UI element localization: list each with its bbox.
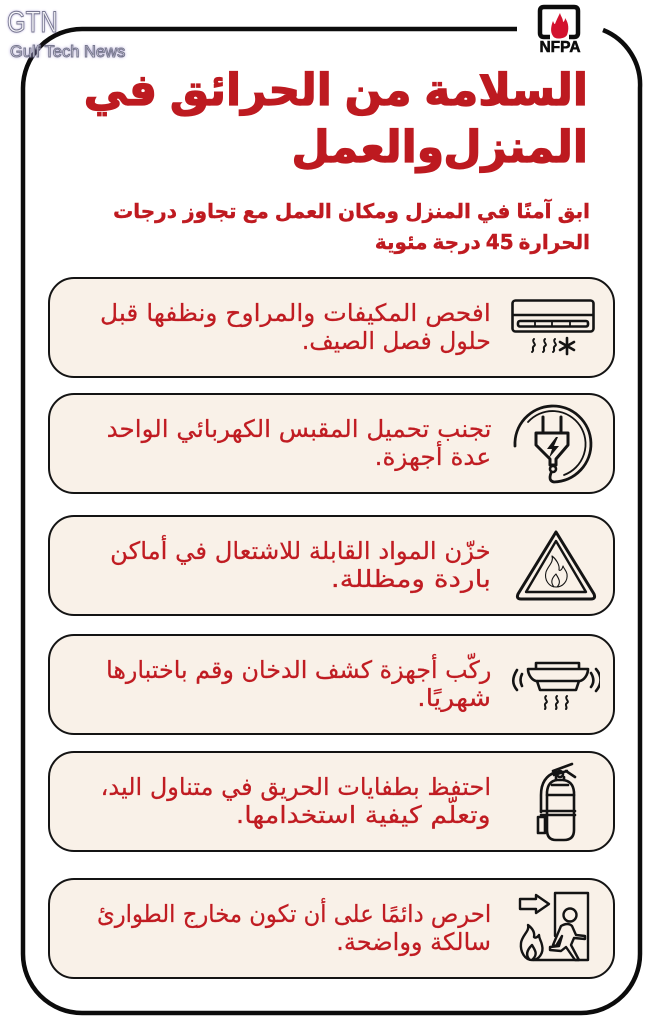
title: المنزل والعمل xyxy=(292,122,588,173)
tip text: تجنب تحميل المقبس الكهربائي الواحد xyxy=(106,415,491,443)
tip text: افحص المكيفات والمراوح ونظفها قبل xyxy=(100,299,491,327)
title xyxy=(84,65,588,174)
tip text xyxy=(106,652,491,712)
panel: emergency exits xyxy=(48,878,615,979)
watermark: GTN Gulf Tech News xyxy=(6,6,126,61)
icon: air conditioner xyxy=(511,299,595,356)
watermark: GTN Gulf Tech News: GTN xyxy=(7,6,58,39)
panel: avoid overloading socket xyxy=(48,393,615,494)
panel: check air conditioners xyxy=(48,277,615,378)
watermark: GTN Gulf Tech News: Gulf Tech News xyxy=(10,43,125,61)
tip text: باردة ومظللة. xyxy=(331,565,491,593)
panel: fire extinguishers xyxy=(48,751,615,852)
tip text: حلول فصل الصيف. xyxy=(302,327,491,355)
logo: NFPA: NFPA xyxy=(539,39,581,56)
tip text: احرص دائمًا على أن تكون مخارج الطوارئ xyxy=(97,900,491,928)
icon: emergency exit xyxy=(518,892,590,962)
logo: NFPA xyxy=(538,4,581,56)
tip text xyxy=(101,773,491,830)
subtitle xyxy=(113,198,590,254)
panel: store flammable materials xyxy=(48,515,615,616)
panel: smoke detectors xyxy=(48,634,615,735)
icon: flammable warning triangle xyxy=(516,530,596,600)
tip text: عدة أجهزة. xyxy=(374,443,491,471)
tip text: خزّن المواد القابلة للاشتعال في أماكن xyxy=(110,537,491,565)
icon: smoke detector xyxy=(512,662,600,710)
icon: fire extinguisher xyxy=(536,762,576,842)
icon: electric plug xyxy=(514,404,592,484)
tip text: شهريًا. xyxy=(417,684,491,712)
tip text xyxy=(100,299,491,356)
subtitle: ابق آمنًا في المنزل ومكان العمل مع تجاوز درجات xyxy=(113,199,590,223)
subtitle: الحرارة 45 درجة مئوية xyxy=(375,230,590,254)
tip text xyxy=(97,898,491,956)
title: السلامة من الحرائق في xyxy=(84,65,588,116)
tip text: سالكة وواضحة. xyxy=(336,928,491,956)
tip text: وتعلّم كيفية استخدامها. xyxy=(236,801,491,829)
tip text xyxy=(110,534,491,594)
tip text xyxy=(106,415,491,472)
tip text: احتفظ بطفايات الحريق في متناول اليد، xyxy=(101,773,491,801)
tip text: ركّب أجهزة كشف الدخان وقم باختبارها xyxy=(106,656,491,684)
